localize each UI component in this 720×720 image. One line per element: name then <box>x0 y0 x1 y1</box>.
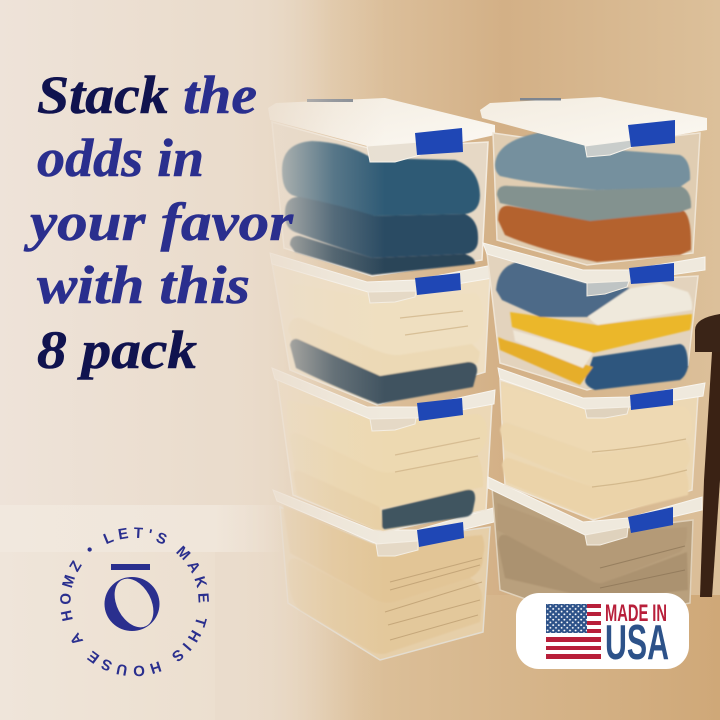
lid rim <box>483 243 705 283</box>
headline: with this <box>37 255 250 315</box>
background: baseboard <box>0 505 285 552</box>
box body <box>272 263 490 405</box>
blanket: lower brown <box>498 535 688 600</box>
badge background <box>516 593 689 669</box>
storage box: second left <box>270 253 493 405</box>
box body <box>493 133 700 265</box>
blanket: middle cream <box>288 318 480 376</box>
blanket: slate blue <box>495 132 690 190</box>
folded navy shirt <box>585 344 688 390</box>
circular logo badge <box>60 527 209 676</box>
blanket: top cream <box>502 385 692 453</box>
blanket: middle teal <box>285 197 478 258</box>
lid <box>480 97 707 146</box>
folded white shirt lower <box>513 330 593 368</box>
folded jeans <box>496 262 630 317</box>
logo letter o <box>104 577 159 631</box>
blanket: lower tan <box>288 559 482 654</box>
box body <box>492 487 693 622</box>
lid shadow slot <box>520 98 561 100</box>
lid rim <box>488 477 702 535</box>
circular slogan: LET'S MAKE THIS HOUSE A HOMZ • <box>60 527 209 676</box>
headline: 8 pack <box>37 320 197 380</box>
box body <box>280 507 490 660</box>
blanket: lower cream <box>293 470 383 530</box>
blue latch <box>628 120 675 147</box>
folded yellow shirt upper <box>510 312 692 353</box>
blanket: grey-green <box>497 186 691 221</box>
storage box: top right <box>480 97 707 265</box>
lid <box>268 98 495 146</box>
headline <box>23 65 294 380</box>
blue latch <box>415 273 461 295</box>
made in USA badge <box>516 593 689 670</box>
lid rim <box>498 368 705 409</box>
headline: Stack the <box>37 65 257 125</box>
blue latch <box>629 263 674 284</box>
usa label: USA <box>605 616 669 670</box>
blanket fold lines <box>385 558 482 640</box>
blue latch <box>417 398 463 421</box>
path for circular text <box>71 538 199 666</box>
blue latch <box>415 128 463 155</box>
storage box: top left <box>268 98 495 276</box>
handle <box>376 541 418 556</box>
folded yellow shirt lower <box>498 337 593 385</box>
headline: your favor <box>23 192 294 252</box>
storage box: bottom left <box>273 490 494 660</box>
blanket: top cream <box>288 283 483 355</box>
blanket: upper tan <box>283 505 484 603</box>
handle <box>585 407 629 418</box>
box body <box>277 378 492 532</box>
blanket: rust <box>498 206 691 262</box>
side table <box>695 314 720 597</box>
storage box: third left <box>272 368 495 532</box>
blue latch <box>628 507 673 533</box>
lid rim <box>273 490 494 544</box>
box body <box>500 380 698 520</box>
blanket fold lines <box>400 311 468 335</box>
left fade overlay <box>215 0 385 720</box>
blanket: dark teal <box>290 339 477 404</box>
handle <box>368 291 416 303</box>
blanket: top cream <box>287 400 487 473</box>
storage box: third right <box>498 368 705 520</box>
blanket: lower cream <box>502 458 689 518</box>
blanket: middle cream <box>500 423 690 488</box>
lid rim <box>270 253 493 292</box>
blue latch <box>417 522 464 547</box>
headline: odds in <box>37 128 204 188</box>
storage box: second right <box>483 243 705 390</box>
blanket: upper brown <box>497 503 687 583</box>
handle <box>587 281 629 296</box>
blanket fold lines <box>592 439 687 487</box>
box body <box>272 122 488 276</box>
icon: american flag <box>546 604 601 659</box>
blanket fold lines <box>395 438 480 472</box>
lid shadow slot <box>307 99 353 102</box>
folded white shirt <box>585 283 692 325</box>
background: floor <box>0 552 720 720</box>
lid rim <box>272 368 495 419</box>
made in label: MADE IN <box>605 600 667 627</box>
handle <box>585 140 632 157</box>
handle <box>370 418 416 431</box>
handle <box>585 527 628 545</box>
blanket: bottom teal <box>290 236 475 275</box>
blanket: top teal <box>282 141 480 216</box>
storage box: bottom right <box>488 477 702 622</box>
logo macron bar <box>111 564 150 570</box>
box body <box>487 253 698 390</box>
blue latch <box>630 389 673 410</box>
blanket: dark teal <box>382 490 475 529</box>
blanket fold lines <box>600 546 685 588</box>
blanket: middle cream <box>290 433 483 507</box>
handle <box>367 142 420 162</box>
